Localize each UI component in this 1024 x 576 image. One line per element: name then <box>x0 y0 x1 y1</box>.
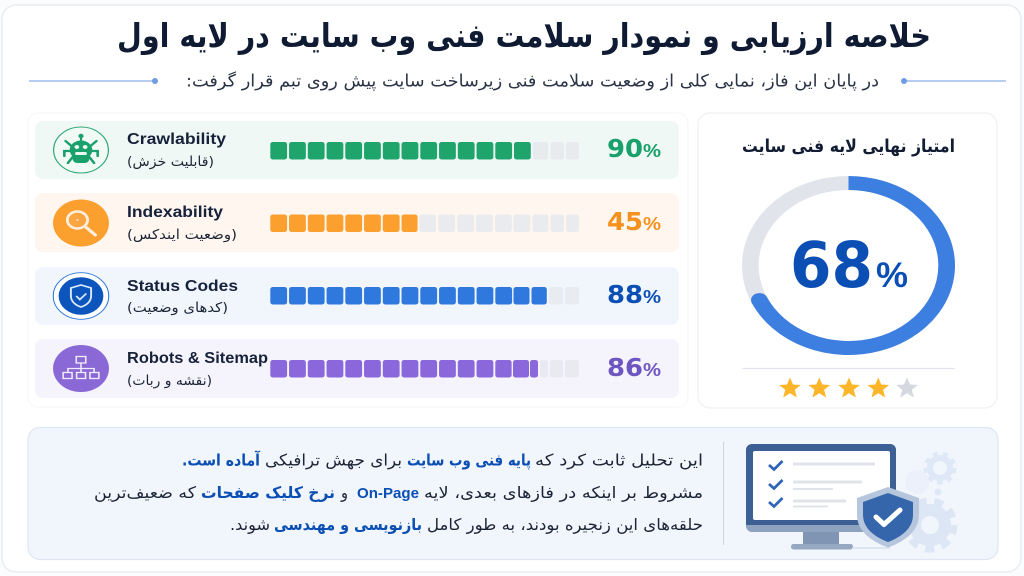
label <box>127 350 268 389</box>
label: Crawlability <box>127 131 226 148</box>
conclusion text: حلقه‌های این زنجیره بودند، به طور کامل <box>427 515 703 535</box>
conclusion text: مشروط بر اینکه در فازهای بعدی، لایه <box>424 483 703 503</box>
subtitle with side rules <box>29 70 1006 92</box>
donut chart: 68% <box>750 183 947 348</box>
value: 45%: 45 <box>607 207 643 236</box>
conclusion text: شوند. <box>230 515 270 535</box>
conclusion text: و <box>340 483 348 503</box>
conclusion text: پایه فنی وب سایت <box>407 450 531 470</box>
icon: sitemap <box>53 345 109 392</box>
row: Indexability <box>35 193 679 252</box>
score value: 68 <box>790 229 873 302</box>
label: Robots & Sitemap <box>127 350 268 367</box>
row: Robots & Sitemap <box>35 339 679 398</box>
value: 88%: % <box>643 287 661 307</box>
progress bar: 86% <box>270 360 579 378</box>
label: (قابلیت خزش) <box>127 154 214 170</box>
conclusion text: نرخ کلیک صفحات <box>201 483 335 502</box>
icon: shield <box>53 273 109 319</box>
icon: shield check <box>857 487 919 548</box>
value: 86%: % <box>643 360 661 380</box>
icon: monitor <box>746 444 896 550</box>
value: 86%: 86 <box>607 353 643 382</box>
score heading: امتیاز نهایی لایه فنی سایت <box>742 137 955 157</box>
label <box>127 204 237 243</box>
subtitle with side rules: در پایان این فاز، نمایی کلی از وضعیت سلامت فنی زیرساخت سایت پیش روی تبم قرار گرفت: <box>186 70 879 92</box>
value: 90%: 90 <box>607 134 643 163</box>
value: 88%: 88 <box>607 280 643 309</box>
label <box>127 278 238 316</box>
value: 86% <box>607 353 661 382</box>
icon: bug <box>54 127 108 173</box>
value: 88% <box>607 280 661 309</box>
panel: metrics list <box>28 113 688 407</box>
label: Status Codes <box>127 278 238 295</box>
conclusion text: بازنویسی و مهندسی <box>274 515 422 534</box>
progress bar: 90% <box>270 142 579 160</box>
conclusion text: On-Page <box>357 485 419 502</box>
conclusion text: که ضعیف‌ترین <box>94 483 196 503</box>
progress bar: 88% <box>270 287 579 304</box>
value: 90%: % <box>643 141 661 161</box>
conclusion text: برای جهش ترافیکی <box>265 450 402 470</box>
panel: conclusion <box>28 428 998 560</box>
label: (کدهای وضعیت) <box>127 300 228 316</box>
row: Status Codes <box>35 267 679 325</box>
progress bar: 45% <box>270 214 579 232</box>
star rating <box>779 378 918 398</box>
icon: magnifier <box>53 200 109 246</box>
icon: gears <box>905 454 954 549</box>
value: 45% <box>607 207 661 236</box>
label: Indexability <box>127 204 223 221</box>
conclusion text: آماده است. <box>182 450 260 470</box>
value: 45%: % <box>643 214 661 234</box>
illustration: monitor, shield and gears <box>746 444 954 550</box>
label: (نقشه و ربات) <box>127 373 212 389</box>
label <box>127 131 226 170</box>
label: (وضعیت ایندکس) <box>127 227 237 243</box>
conclusion text <box>94 450 703 535</box>
row: Crawlability <box>35 121 679 179</box>
panel: final score <box>698 113 997 408</box>
value: 90% <box>607 134 661 163</box>
score value: % <box>876 256 908 295</box>
conclusion text: این تحلیل ثابت کرد که <box>535 450 703 470</box>
